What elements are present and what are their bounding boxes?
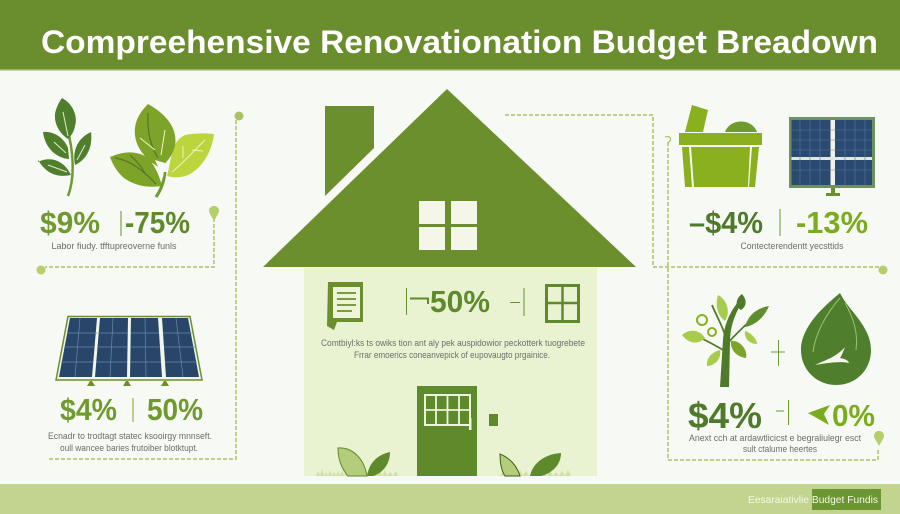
document icon bbox=[327, 282, 363, 330]
stat: labor: Labor fiudy. tfftupreoverne funls bbox=[52, 241, 177, 252]
icon: sprig bbox=[38, 98, 91, 196]
house illustration bbox=[263, 89, 636, 476]
attic window bbox=[419, 201, 477, 250]
icon: tree bbox=[682, 294, 769, 387]
stat: solar bbox=[48, 392, 212, 454]
stat: solar: 50% bbox=[147, 392, 203, 427]
stat: contingency: -13% bbox=[796, 205, 868, 240]
connector lines bbox=[36, 112, 888, 460]
stat: centre: 50% bbox=[430, 284, 490, 319]
icon: solar panel upright bbox=[789, 117, 875, 196]
icon: solar panel bbox=[56, 316, 202, 386]
chimney bbox=[325, 106, 374, 196]
stat: labor: -75% bbox=[125, 205, 190, 240]
icon: water drop bbox=[801, 293, 871, 385]
footer band bbox=[0, 484, 900, 514]
stat: labor bbox=[40, 205, 190, 252]
stat: labor: $9% bbox=[40, 205, 100, 240]
panel: bottom right, tree and drop bbox=[682, 293, 875, 455]
icon: materials bucket bbox=[679, 105, 762, 187]
panel: top right, materials bbox=[679, 105, 875, 252]
grass and leaves bbox=[316, 448, 571, 476]
stat: contingency bbox=[689, 205, 868, 252]
house body bbox=[304, 268, 597, 476]
roof bbox=[263, 89, 636, 267]
stat: solar: oull wancee baries frutoiber blotktupt. bbox=[60, 443, 198, 454]
header banner bbox=[0, 0, 900, 71]
footer button bbox=[812, 489, 881, 510]
icon: three leaves bbox=[110, 104, 214, 197]
stat: contingency: –$4% bbox=[689, 205, 763, 240]
panel: top left, leaves bbox=[38, 98, 214, 252]
window icon bbox=[546, 285, 579, 322]
door side lamp bbox=[489, 414, 498, 426]
stat: centre bbox=[406, 284, 524, 319]
stat: water: Anext cch at ardawtlicicst e begraliulegr esct bbox=[689, 433, 861, 444]
centre caption: Frrar emoerics coneanvepick of eupovaugto prgainice. bbox=[354, 350, 550, 361]
footer label: Eesaraiativlie Budget Fundis bbox=[748, 494, 878, 506]
stat: water: 0% bbox=[832, 398, 875, 433]
centre caption: Comtbiyl:ks ts owiks tion ant aly pek auspidowior peckotterk tuogrebete bbox=[321, 338, 585, 349]
stat: contingency: Contecterendentt yecsttids bbox=[740, 241, 844, 252]
stat: water: $4% bbox=[688, 395, 762, 436]
panel: bottom left, solar bbox=[48, 316, 212, 454]
title: Compreehensive Renovationation Budget Breadown bbox=[41, 24, 878, 60]
stat: solar: Ecnadr to trodtagt statec ksooirgy mnnseft. bbox=[48, 431, 212, 442]
stat: solar: $4% bbox=[60, 392, 117, 427]
centre caption bbox=[321, 338, 585, 361]
stat: water bbox=[688, 395, 875, 455]
stat: water: sult ctalume heertes bbox=[743, 444, 817, 455]
door bbox=[417, 386, 477, 476]
plus sign bbox=[771, 340, 785, 366]
